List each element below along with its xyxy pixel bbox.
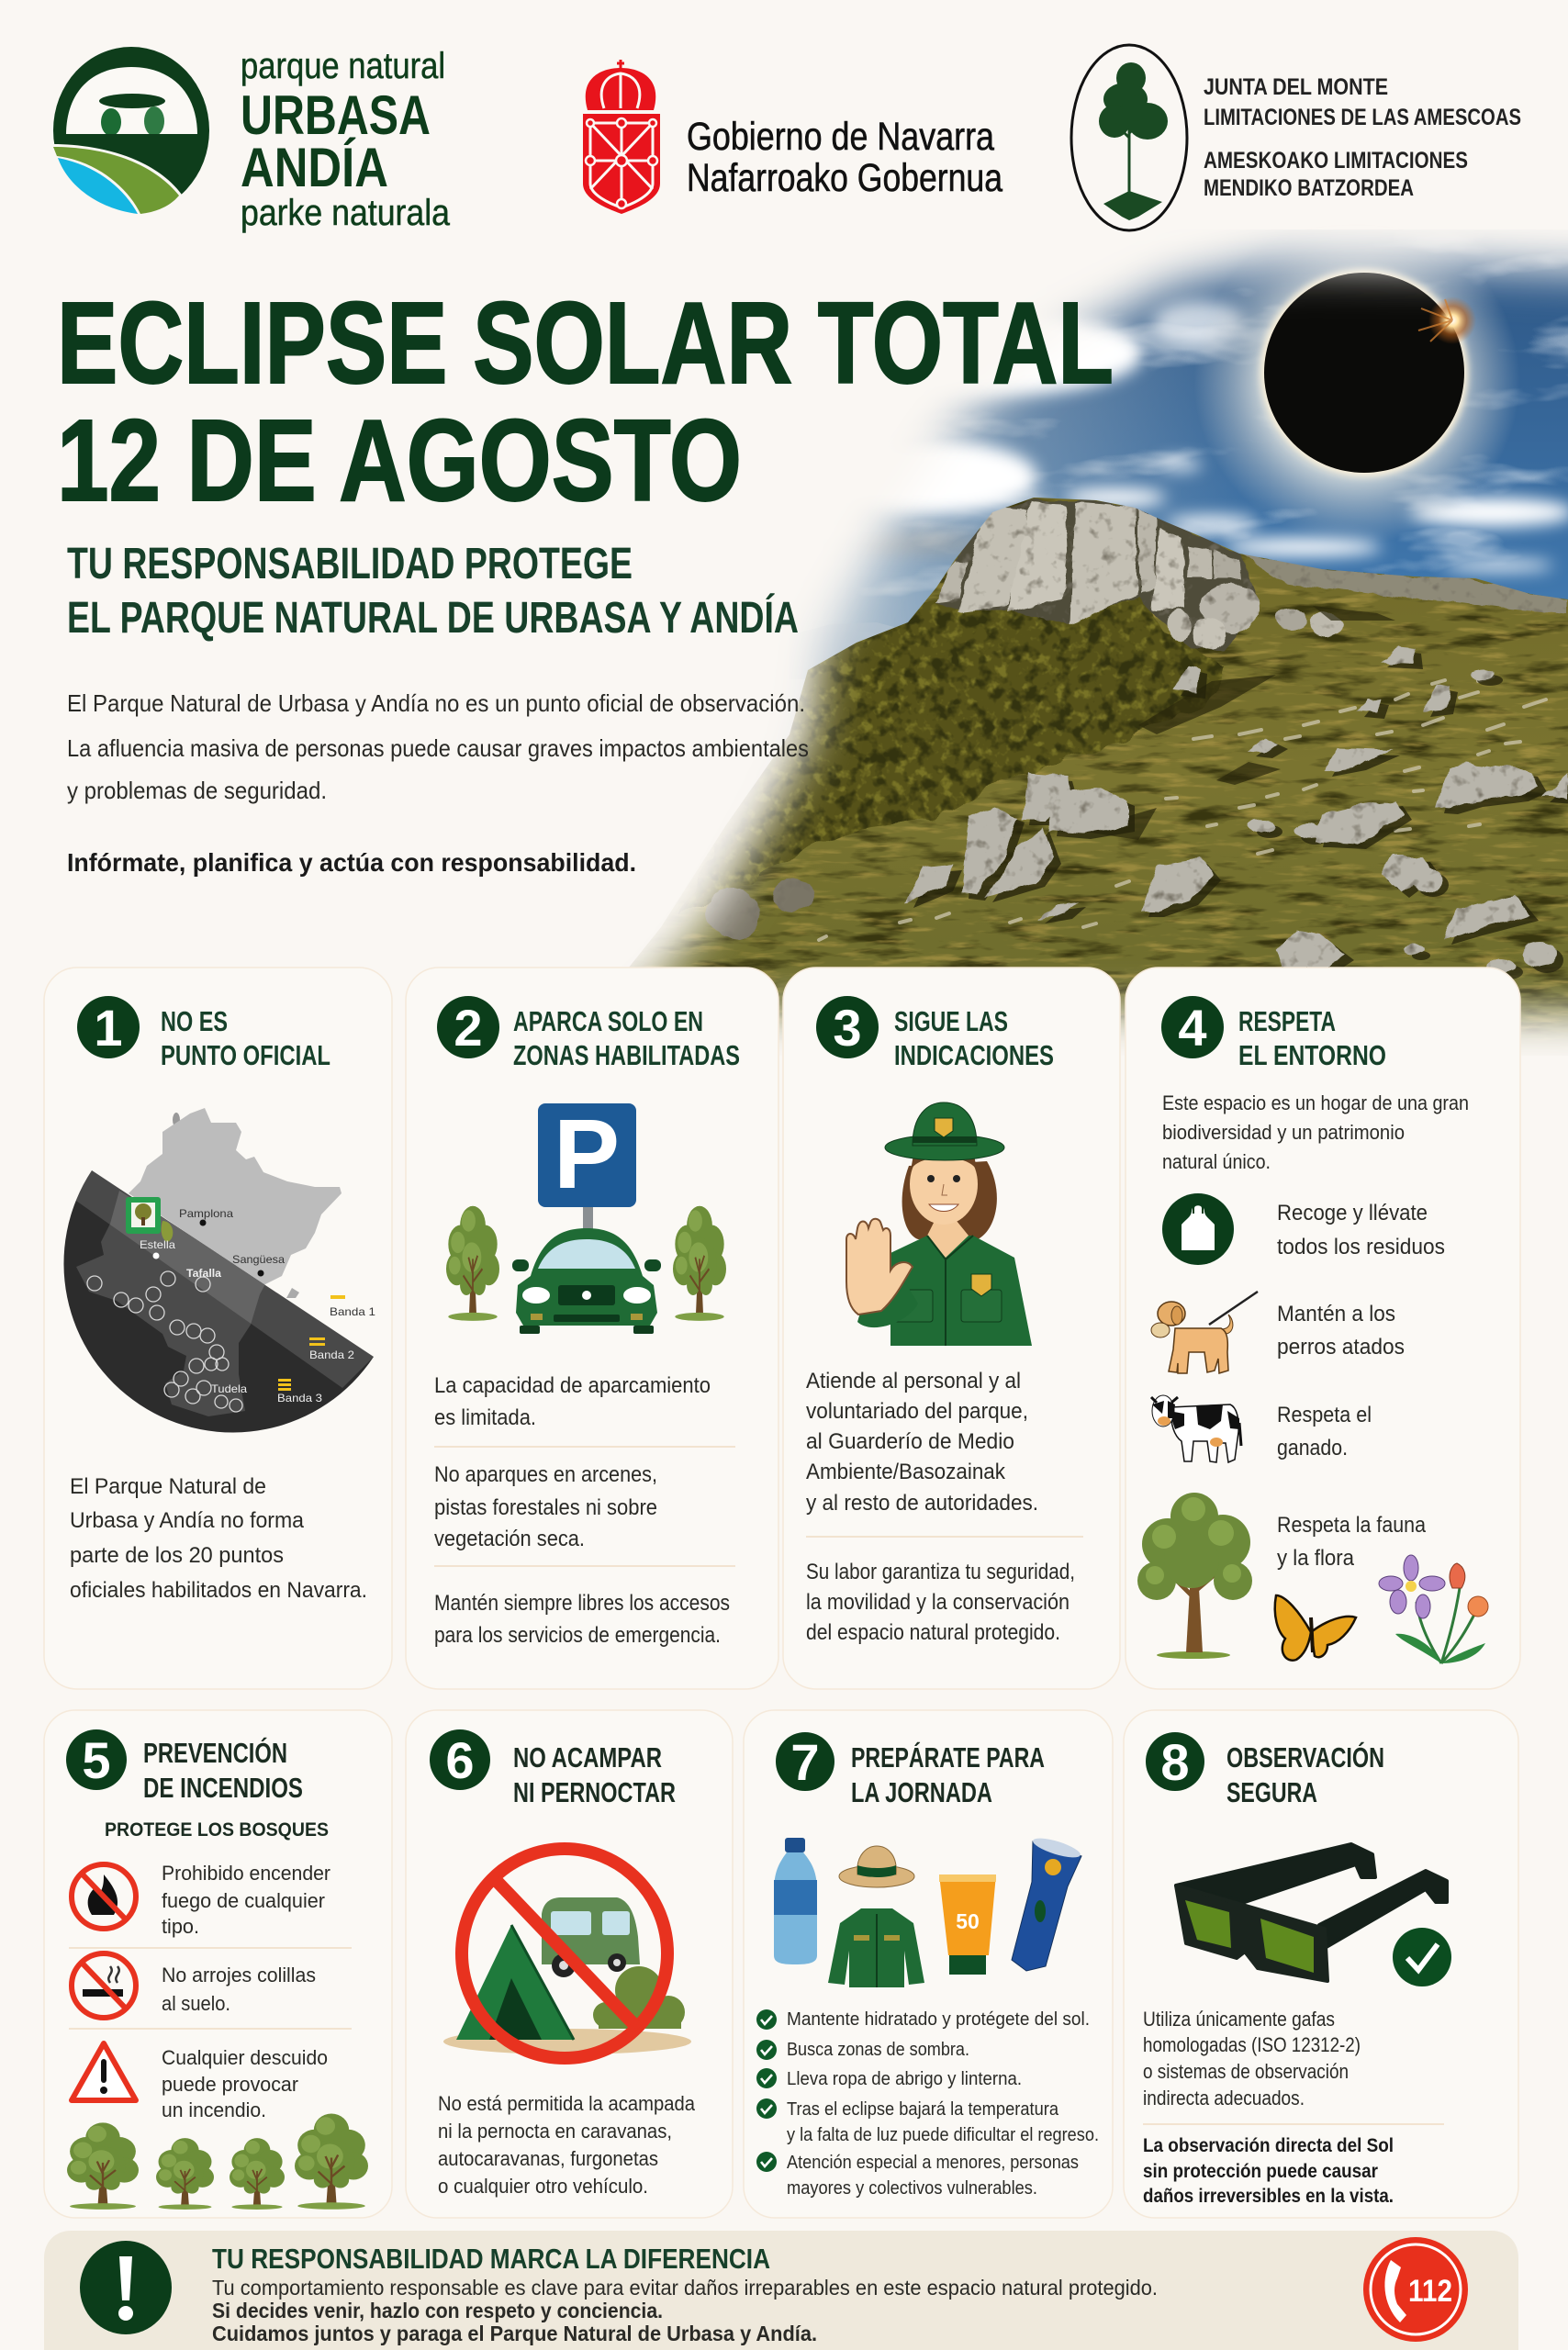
clouds [623, 239, 1568, 967]
heading 5: DE INCENDIOS [143, 1772, 303, 1804]
text: residuos: Recoge y llévate [1277, 1201, 1428, 1225]
icon: exclamation [80, 2241, 172, 2334]
text 6: ni la pernocta en caravanas, [438, 2120, 672, 2143]
number badge 6: 6 [445, 1731, 475, 1789]
text: fuego: Prohibido encender [162, 1862, 330, 1885]
heading 3: INDICACIONES [894, 1039, 1054, 1071]
text: descuido: un incendio. [162, 2098, 266, 2121]
intro text: El Parque Natural de Urbasa y Andía no es un punto oficial de observación. [67, 689, 805, 717]
text: descuido: puede provocar [162, 2073, 298, 2096]
panel: 5 prevención de incendios [44, 1710, 392, 2218]
heading 7: LA JORNADA [851, 1776, 992, 1808]
heading 2: APARCA SOLO EN [513, 1005, 703, 1037]
panel: 2 aparca solo en zonas habilitadas [406, 968, 778, 1689]
text 8: Utiliza únicamente gafas [1143, 2008, 1335, 2031]
text 3: voluntariado del parque, [806, 1399, 1028, 1424]
number badge 7 [776, 1732, 834, 1791]
text 2 [434, 1373, 735, 1648]
banner heading: TU RESPONSABILIDAD MARCA LA DIFERENCIA [212, 2243, 770, 2275]
text: residuos [1277, 1201, 1445, 1259]
intro text: y problemas de seguridad. [67, 777, 327, 804]
map of eclipse bands in Navarra: Estella [140, 1238, 175, 1251]
heading 2: ZONAS HABILITADAS [513, 1039, 740, 1071]
panel: 1 no es punto oficial [44, 968, 392, 1689]
heading 8: OBSERVACIÓN [1226, 1740, 1384, 1774]
text 2: vegetación seca. [434, 1527, 585, 1551]
icon: no fire [72, 1864, 136, 1929]
panel: 6 no acampar ni pernoctar [406, 1710, 733, 2218]
text 8: sin protección puede causar [1143, 2161, 1378, 2182]
text 4 intro [1162, 1091, 1469, 1173]
number badge 3 [816, 996, 879, 1058]
number badge 4: 4 [1178, 999, 1207, 1057]
icon: butterfly [1275, 1595, 1356, 1661]
logo: Junta del Monte Limitaciones: JUNTA DEL MONTE [1204, 74, 1388, 100]
banner text: Si decides venir, hazlo con respeto y conciencia. [212, 2299, 663, 2322]
heading 1 [161, 1005, 330, 1071]
text: colillas: al suelo. [162, 1992, 230, 2015]
icon: check badge [1393, 1928, 1451, 1986]
heading 4: RESPETA [1238, 1005, 1336, 1037]
icon: Navarra coat of arms [583, 60, 660, 214]
hero photo: mountain and eclipse [551, 218, 1568, 1056]
icon: sunscreen: 50 [956, 1909, 980, 1933]
limestone cliff [936, 500, 1568, 650]
text: fauna y flora: Respeta la fauna [1277, 1513, 1427, 1538]
checklist: Atención especial a menores, personas [787, 2153, 1079, 2173]
icon: row of trees [67, 2113, 368, 2210]
logo: parque natural Urbasa Andía: parque natural [241, 46, 445, 86]
map of eclipse bands in Navarra: Sangüesa [232, 1253, 285, 1266]
text 6: No está permitida la acampada [438, 2092, 696, 2115]
heading 7 [851, 1741, 1045, 1808]
map of eclipse bands in Navarra: Banda 2 [309, 1348, 354, 1361]
text 8: La observación directa del Sol [1143, 2135, 1394, 2156]
text: colillas: No arrojes colillas [162, 1964, 316, 1986]
subtitle: TU RESPONSABILIDAD PROTEGE [67, 540, 633, 588]
logo: Junta del Monte Limitaciones: MENDIKO BATZORDEA [1204, 175, 1414, 201]
number badge 5 [66, 1729, 127, 1790]
text 1: oficiales habilitados en Navarra. [70, 1578, 367, 1603]
heading 6 [513, 1741, 676, 1808]
text 4 intro: natural único. [1162, 1150, 1271, 1173]
text 2: La capacidad de aparcamiento [434, 1373, 711, 1398]
text 6: o cualquier otro vehículo. [438, 2175, 648, 2198]
number badge 2 [437, 996, 499, 1058]
checklist: Lleva ropa de abrigo y linterna. [787, 2069, 1022, 2089]
heading 5 [143, 1736, 303, 1804]
text: perros: Mantén a los [1277, 1302, 1395, 1326]
van [542, 1897, 640, 1977]
title [57, 278, 1114, 525]
heading 7: PREPÁRATE PARA [851, 1741, 1045, 1774]
icon: park ranger with raised hand [846, 1102, 1032, 1346]
icon: park emblem [46, 47, 209, 225]
text: residuos: todos los residuos [1277, 1235, 1445, 1259]
text: perros [1277, 1302, 1405, 1360]
icon: flowers [1379, 1555, 1488, 1663]
icon: sunscreen [939, 1874, 996, 1975]
logo: Gobierno de Navarra: Nafarroako Gobernua [687, 156, 1002, 200]
logo: Gobierno de Navarra [583, 60, 1002, 214]
icon: water bottle [774, 1838, 817, 1964]
icon: jacket [828, 1908, 924, 1987]
logo: parque natural Urbasa Andía: URBASA [241, 84, 431, 146]
text 3: y al resto de autoridades. [806, 1491, 1038, 1516]
number badge 4 [1161, 996, 1224, 1058]
map of eclipse bands in Navarra: Banda 3 [277, 1392, 322, 1404]
text 2: No aparques en arcenes, [434, 1462, 657, 1487]
icon: large tree [1137, 1493, 1252, 1659]
text: ganado: ganado. [1277, 1436, 1348, 1460]
icon: parking sign with car and trees [446, 1098, 726, 1334]
number badge 6 [430, 1729, 490, 1790]
boulders [706, 646, 1568, 979]
text 2: pistas forestales ni sobre [434, 1495, 657, 1520]
logo: parque natural Urbasa Andía: ANDÍA [241, 137, 388, 198]
heading 6: NO ACAMPAR [513, 1741, 662, 1774]
banner text [212, 2276, 1158, 2345]
text 8: o sistemas de observación [1143, 2060, 1349, 2083]
icon: dog on leash [1151, 1292, 1258, 1373]
intro text: Infórmate, planifica y actúa con responsabilidad. [67, 848, 636, 877]
checklist: y la falta de luz puede dificultar el regreso. [787, 2125, 1099, 2145]
hillside [569, 487, 1568, 1056]
text 1: El Parque Natural de [70, 1474, 266, 1499]
forest [679, 588, 1226, 918]
heading 1: PUNTO OFICIAL [161, 1039, 330, 1071]
text 6 [438, 2092, 696, 2198]
text 2: Mantén siempre libres los accesos [434, 1591, 730, 1616]
checklist [756, 2009, 1099, 2199]
text: fauna y flora [1277, 1513, 1427, 1571]
text 2: para los servicios de emergencia. [434, 1623, 721, 1648]
heading 2 [513, 1005, 740, 1071]
text: fuego: fuego de cualquier [162, 1889, 325, 1912]
heading 3 [894, 1005, 1054, 1071]
distant mountains [872, 622, 894, 633]
heading 8: SEGURA [1226, 1776, 1317, 1808]
icon: parking sign with car and trees: P [554, 1098, 620, 1209]
number badge 1 [77, 996, 140, 1058]
icon: no camping sign [443, 1849, 691, 2058]
text 2: es limitada. [434, 1405, 536, 1430]
number badge 1: 1 [94, 999, 123, 1057]
text 1: Urbasa y Andía no forma [70, 1508, 305, 1533]
panel: 8 observación segura [1124, 1710, 1518, 2218]
heading 3: SIGUE LAS [894, 1005, 1008, 1037]
checklist: Mantente hidratado y protégete del sol. [787, 2009, 1090, 2030]
icon: oak tree in oval [1071, 45, 1187, 230]
subtitle [67, 540, 799, 643]
text 3: del espacio natural protegido. [806, 1620, 1060, 1645]
map of eclipse bands in Navarra [55, 1108, 375, 1433]
checklist: Busca zonas de sombra. [787, 2040, 969, 2060]
map of eclipse bands in Navarra: Banda 1 [330, 1305, 375, 1318]
number badge 8 [1146, 1732, 1204, 1791]
banner text: Tu comportamiento responsable es clave para evitar daños irreparables en este espacio natural protegido. [212, 2276, 1158, 2300]
text: perros: perros atados [1277, 1335, 1405, 1360]
text 8 [1143, 2008, 1444, 2207]
number badge 7: 7 [790, 1733, 820, 1791]
text: fauna y flora: y la flora [1277, 1546, 1355, 1571]
text 4 intro: biodiversidad y un patrimonio [1162, 1121, 1405, 1144]
checklist: mayores y colectivos vulnerables. [787, 2178, 1037, 2199]
checklist: Tras el eclipse bajará la temperatura [787, 2099, 1059, 2120]
text 3: Ambiente/Basozainak [806, 1460, 1006, 1484]
panel: 4 respeta el entorno [1126, 968, 1520, 1689]
text: fuego: tipo. [162, 1915, 199, 1938]
number badge 5: 5 [82, 1731, 111, 1789]
heading 5: PREVENCIÓN [143, 1736, 287, 1769]
icon: eclipse glasses [1176, 1844, 1447, 1981]
text 3 [806, 1369, 1083, 1645]
logo: parque natural Urbasa Andía [46, 46, 451, 233]
sky [801, 229, 1568, 691]
map of eclipse bands in Navarra: Pamplona [179, 1207, 233, 1220]
text: fuego [162, 1862, 330, 1938]
icon: flashlight [1012, 1834, 1082, 1971]
panel: 3 sigue las indicaciones [783, 968, 1120, 1689]
intro text: La afluencia masiva de personas puede causar graves impactos ambientales [67, 734, 809, 762]
icon: 112 emergency [1363, 2237, 1468, 2342]
text: ganado [1277, 1403, 1372, 1460]
subtitle: EL PARQUE NATURAL DE URBASA Y ANDÍA [67, 593, 799, 643]
icon: no cigarette [72, 1953, 136, 2018]
tent [456, 1925, 574, 2040]
number badge 2: 2 [454, 999, 483, 1057]
tree marker [126, 1197, 161, 1234]
logo: Junta del Monte Limitaciones: AMESKOAKO LIMITACIONES [1204, 148, 1468, 173]
text 3: al Guarderío de Medio [806, 1429, 1014, 1454]
title: 12 DE AGOSTO [57, 396, 742, 525]
terrain shadows [1079, 606, 1395, 840]
text 3: Su labor garantiza tu seguridad, [806, 1560, 1075, 1584]
bushes [593, 1966, 685, 2029]
icon: 112 emergency: 112 [1408, 2274, 1452, 2309]
panel: responsibility banner [44, 2231, 1518, 2350]
text 6: autocaravanas, furgonetas [438, 2147, 658, 2170]
icon: waste bag [1162, 1193, 1234, 1265]
number badge 3: 3 [833, 999, 862, 1057]
heading 6: NI PERNOCTAR [513, 1776, 676, 1808]
icon: cow [1151, 1395, 1241, 1462]
heading 8 [1226, 1740, 1384, 1808]
text: descuido: Cualquier descuido [162, 2046, 328, 2069]
icon: warning triangle [72, 2043, 136, 2100]
title: ECLIPSE SOLAR TOTAL [57, 278, 1114, 408]
text: ganado: Respeta el [1277, 1403, 1372, 1427]
raised hand [846, 1219, 913, 1315]
eclipse halo [1199, 244, 1516, 538]
number badge 8: 8 [1160, 1733, 1190, 1791]
text 8: daños irreversibles en la vista. [1143, 2186, 1394, 2207]
map of eclipse bands in Navarra: Tafalla [186, 1267, 221, 1280]
text 8: indirecta adecuados. [1143, 2087, 1305, 2109]
map of eclipse bands in Navarra: Tudela [211, 1382, 247, 1395]
text 4 intro: Este espacio es un hogar de una gran [1162, 1091, 1469, 1114]
banner text: Cuidamos juntos y paraga el Parque Natural de Urbasa y Andía. [212, 2322, 817, 2345]
heading 4 [1238, 1005, 1386, 1071]
text 3: Atiende al personal y al [806, 1369, 1021, 1393]
icon: hat [839, 1846, 914, 1887]
eclipse disc [1260, 269, 1476, 476]
text 1 [70, 1474, 367, 1603]
heading 1: NO ES [161, 1005, 228, 1037]
text: descuido [162, 2046, 328, 2121]
logo: Gobierno de Navarra: Gobierno de Navarra [687, 115, 994, 159]
icon: green car [512, 1228, 661, 1334]
subheading: protege los bosques: PROTEGE LOS BOSQUES [105, 1819, 329, 1841]
text 8: homologadas (ISO 12312-2) [1143, 2033, 1361, 2056]
limestone strips [819, 677, 1546, 940]
intro text [67, 689, 809, 877]
text 1: parte de los 20 puntos [70, 1543, 284, 1568]
logo: parque natural Urbasa Andía: parke naturala [241, 193, 451, 233]
text: colillas [162, 1964, 316, 2015]
text 3: la movilidad y la conservación [806, 1590, 1070, 1615]
logo: Junta del Monte Limitaciones [1071, 45, 1521, 230]
heading 4: EL ENTORNO [1238, 1039, 1386, 1071]
panel: 7 prepárate para la jornada [744, 1710, 1113, 2218]
